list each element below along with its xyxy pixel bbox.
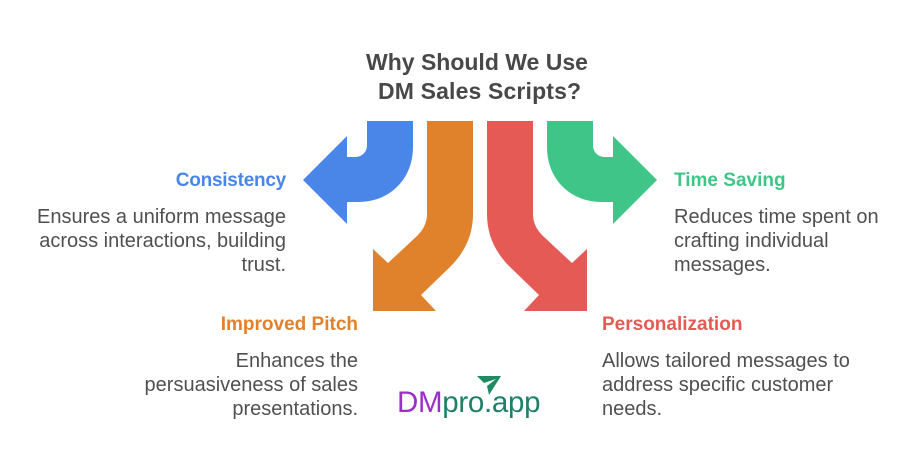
text: consistency	[37, 206, 286, 276]
title	[366, 49, 588, 104]
text: improved pitch: Enhances the	[236, 350, 358, 372]
text: time saving: messages.	[674, 254, 771, 276]
heading: time saving: Time Saving	[674, 170, 786, 191]
text: improved pitch: persuasiveness of sales	[145, 374, 358, 396]
heading: consistency: Consistency	[176, 170, 286, 191]
text: improved pitch: presentations.	[232, 398, 358, 420]
text: time saving: crafting individual	[674, 230, 829, 252]
logo text: DMpro.app	[397, 386, 540, 419]
panel: improved pitch	[145, 314, 358, 420]
panel: consistency	[37, 170, 286, 276]
text: consistency: Ensures a uniform message	[37, 206, 286, 228]
title: DM Sales Scripts?	[378, 78, 581, 104]
text: personalization: Allows tailored messages to	[602, 350, 850, 372]
panel: personalization	[602, 314, 850, 420]
arrow: time saving	[547, 121, 657, 224]
arrow: consistency	[303, 121, 413, 224]
text: consistency: trust.	[242, 254, 286, 276]
arrow: improved pitch	[373, 121, 473, 311]
text: consistency: across interactions, building	[39, 230, 286, 252]
icon: paper plane	[477, 376, 501, 395]
text: personalization: address specific customer	[602, 374, 833, 396]
logo: DMpro.app	[397, 376, 540, 419]
heading: personalization: Personalization	[602, 314, 742, 335]
text: personalization: needs.	[602, 398, 662, 420]
arrow: personalization	[487, 121, 587, 311]
text: time saving: Reduces time spent on	[674, 206, 879, 228]
title: Why Should We Use	[366, 49, 588, 75]
heading: improved pitch: Improved Pitch	[221, 314, 358, 335]
text: improved pitch	[145, 350, 358, 420]
text: personalization	[602, 350, 850, 420]
panel: time saving	[674, 170, 879, 276]
text: time saving	[674, 206, 879, 276]
